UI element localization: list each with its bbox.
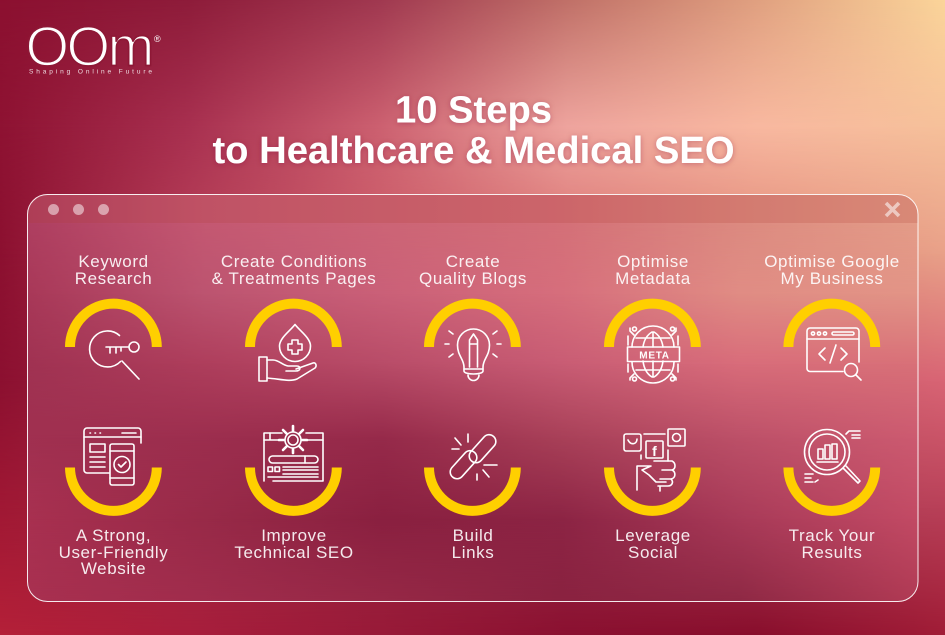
step 9: Leverage social (609, 429, 696, 562)
step 10: Track your results: Track Your (789, 526, 875, 545)
step 2: Conditions and treatments pages: & Treatments Pages (212, 269, 376, 288)
logo: Shaping Online Future (29, 68, 155, 76)
title: to Healthcare & Medical SEO (212, 129, 735, 172)
logo: OOm (26, 14, 152, 78)
icon: key in magnifier (90, 331, 139, 379)
step 10: Track your results (788, 430, 875, 562)
step 9: Leverage social: f (652, 443, 657, 459)
step 6: Strong, user-friendly website (59, 428, 168, 578)
icon: chain link (447, 432, 499, 482)
step 5: Optimise Google My Business: Optimise Google (764, 252, 900, 271)
step 2: Conditions and treatments pages (212, 252, 376, 381)
window dots (48, 204, 109, 215)
step 3: Quality blogs: Create (446, 252, 500, 271)
icon: light bulb with pencil (445, 329, 501, 381)
step 6: Strong, user-friendly website: User-Friendly (59, 543, 168, 562)
close icon (886, 203, 899, 216)
step 5: Optimise Google My Business: My Business (781, 269, 883, 288)
step 7: Improve technical SEO: Improve (261, 526, 327, 545)
logo: ® (154, 34, 161, 44)
panel: browser window fill (27, 194, 918, 602)
title: 10 Steps (395, 88, 552, 132)
panel border and window controls (28, 194, 918, 602)
icon: window with gear (264, 426, 323, 481)
icon: meta globe (628, 326, 680, 383)
step 1: Keyword Research: Keyword (78, 252, 149, 271)
title (212, 88, 735, 172)
step 7: Improve technical SEO (234, 426, 354, 562)
step 9: Leverage social: Social (628, 543, 678, 562)
step 9: Leverage social: Leverage (615, 526, 691, 545)
step 8: Build links: Links (452, 543, 494, 562)
step 4: Optimise metadata: Metadata (615, 269, 691, 288)
icon: hand with drop (259, 324, 316, 381)
step 1: Keyword Research: Research (75, 269, 152, 288)
step 2: Conditions and treatments pages: Create Conditions (221, 252, 367, 271)
step 8: Build links: Build (453, 526, 493, 545)
step 6: Strong, user-friendly website: Website (81, 559, 146, 578)
step 4: Optimise metadata: META (639, 350, 670, 362)
step 6: Strong, user-friendly website: A Strong, (76, 526, 151, 545)
step 8: Build links (429, 432, 516, 562)
icon: responsive devices (84, 428, 141, 485)
step 3: Quality blogs (419, 252, 527, 381)
step 7: Improve technical SEO: Technical SEO (234, 543, 354, 562)
step 10: Track your results: Results (802, 543, 862, 562)
icon: magnifier with bar chart (804, 430, 860, 483)
step 1: Keyword Research (70, 252, 157, 379)
step 4: Optimise metadata: Optimise (617, 252, 689, 271)
step 4: Optimise metadata (609, 252, 696, 383)
step 3: Quality blogs: Quality Blogs (419, 269, 527, 288)
step 5: Optimise Google My Business (764, 252, 900, 380)
icon: code window with magnifier (807, 328, 861, 380)
icon: hand holding social signs (624, 429, 685, 491)
